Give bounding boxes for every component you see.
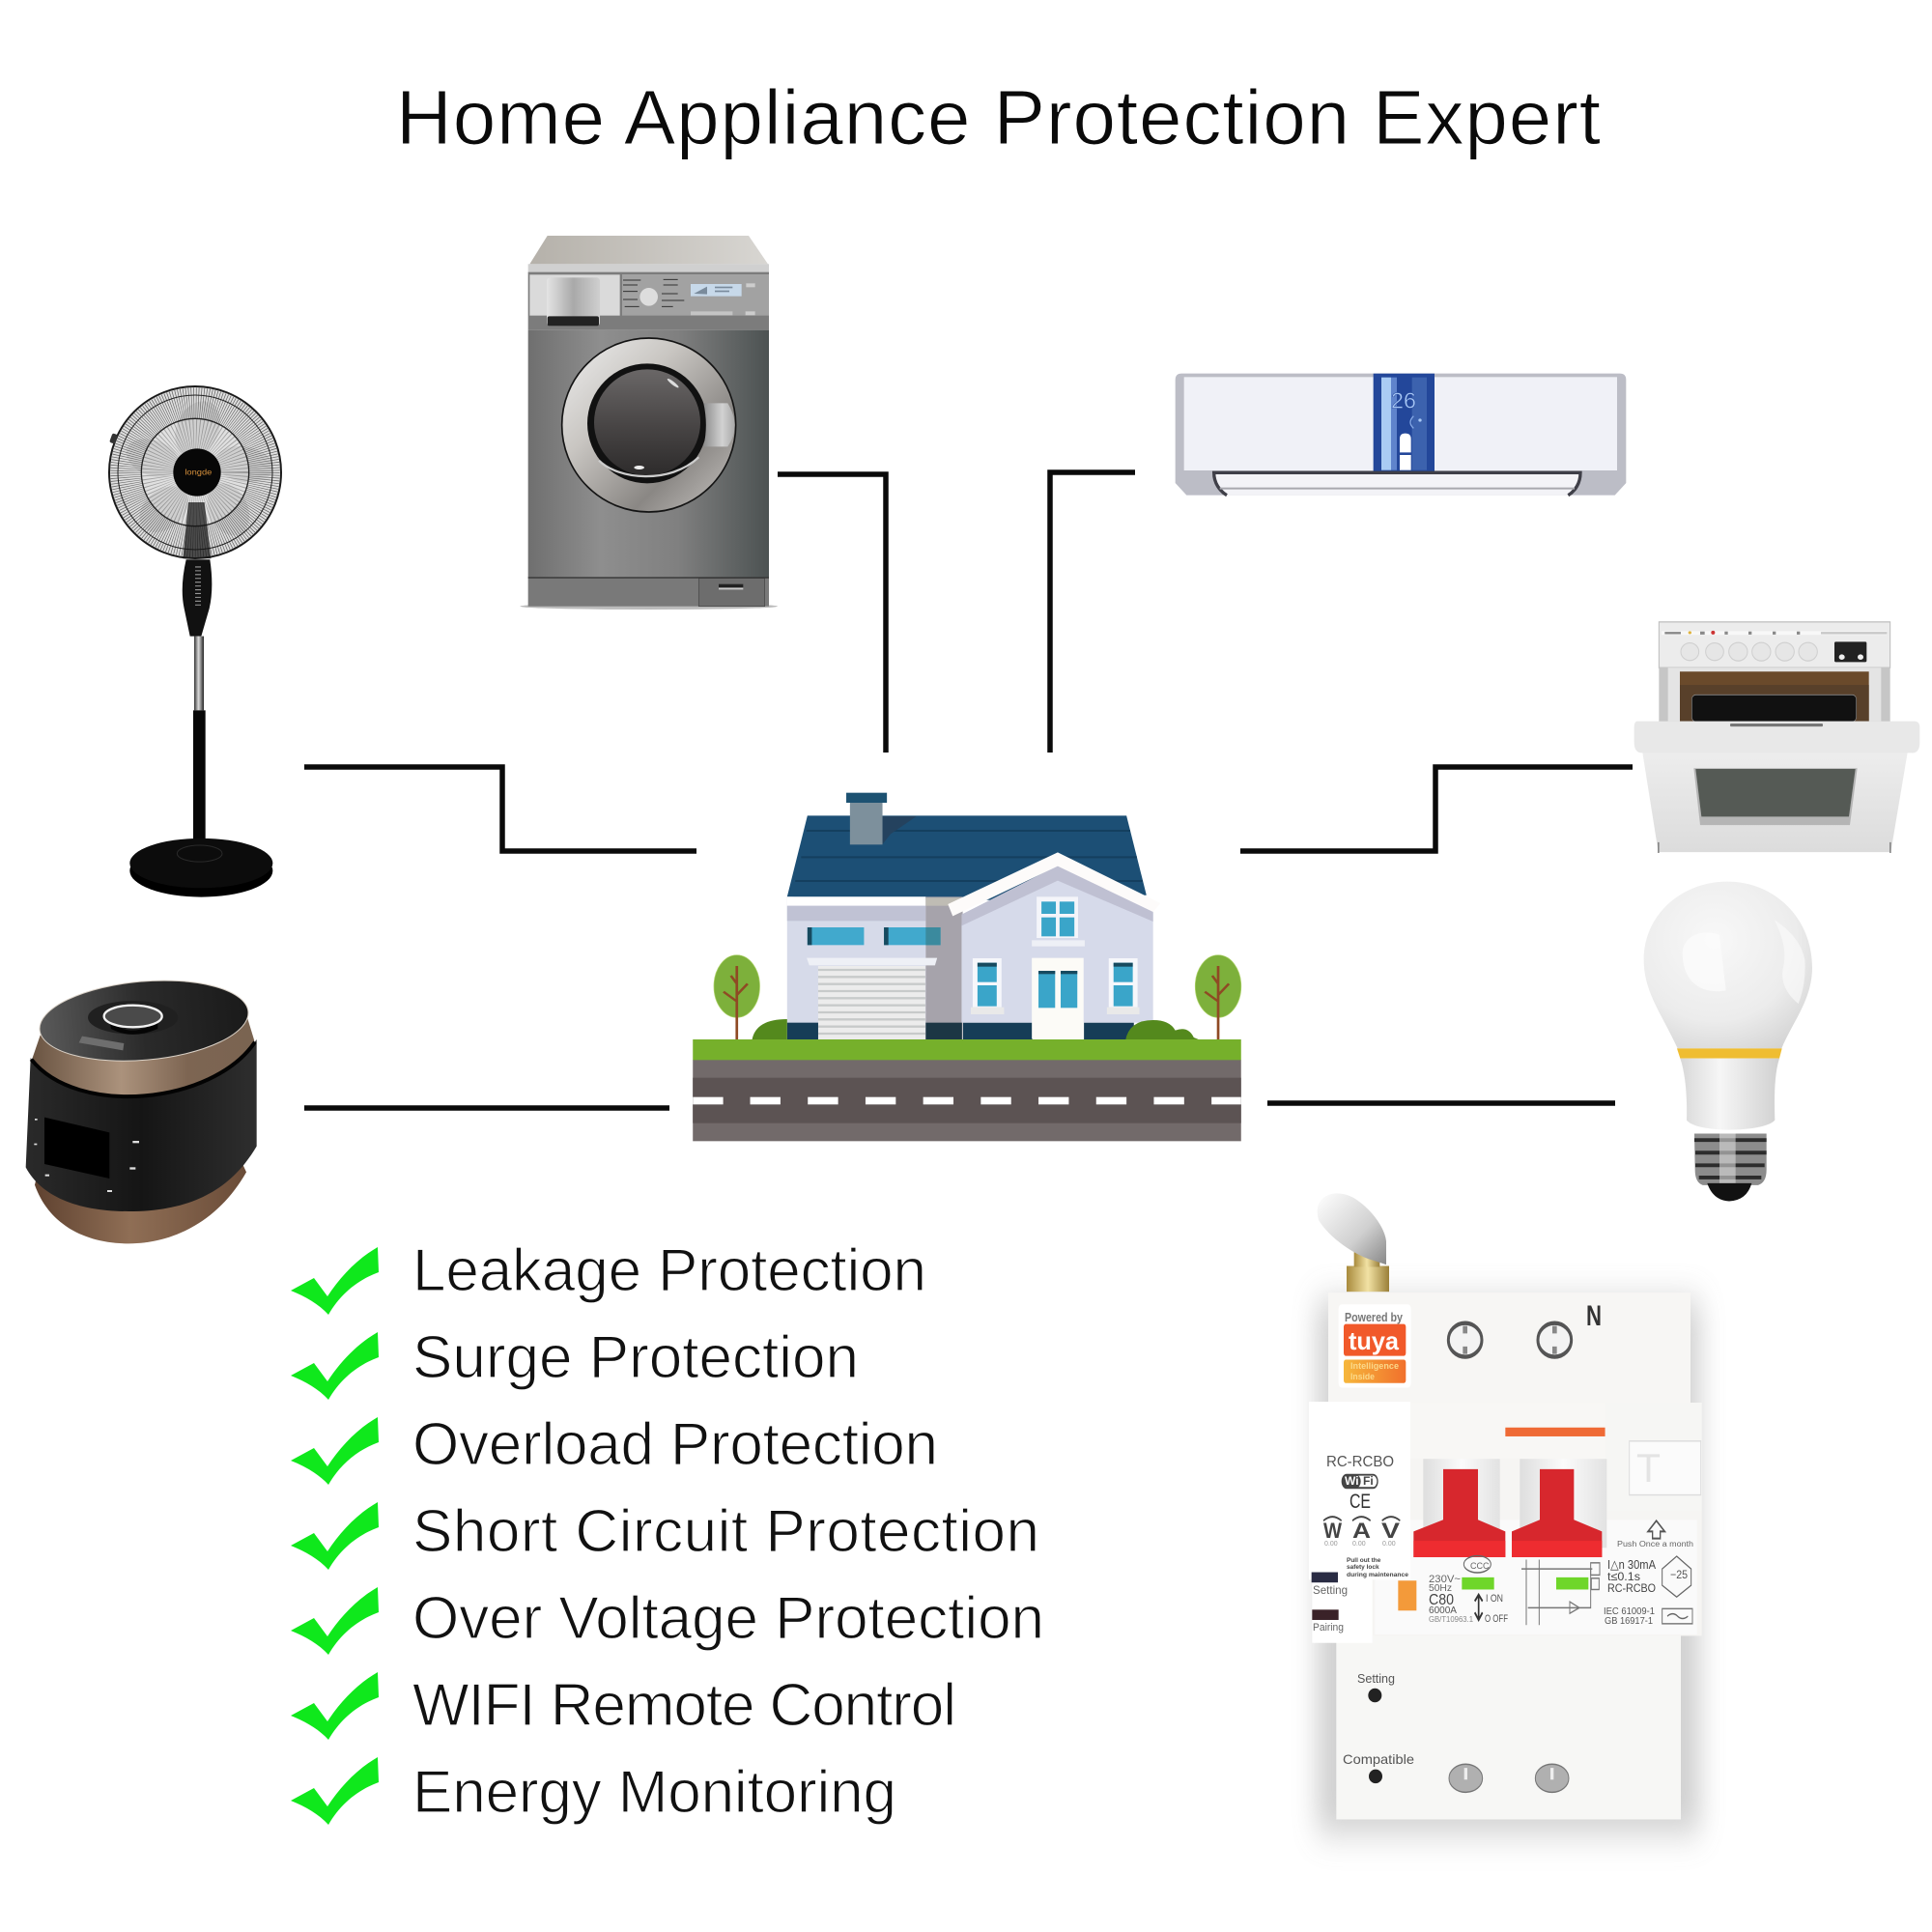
- breaker label text: O OFF: [1485, 1613, 1508, 1625]
- breaker label text: T: [1636, 1445, 1661, 1491]
- breaker label text: CE: [1350, 1491, 1371, 1513]
- breaker label text: Inside: [1350, 1372, 1375, 1382]
- breaker label text: I ON: [1486, 1593, 1503, 1605]
- breaker label text: N: [1586, 1300, 1602, 1332]
- dial: [88, 1001, 178, 1035]
- item: surge protection: Surge Protection: [412, 1324, 859, 1391]
- breaker label text: Wi: [1345, 1474, 1359, 1488]
- breaker label text: tuya: [1349, 1326, 1400, 1355]
- garage wing: [787, 896, 963, 1040]
- lawn: [693, 1039, 1241, 1061]
- fan hub: [173, 448, 221, 497]
- arrow: oven to house: [1240, 767, 1633, 851]
- icon: oven: [1634, 622, 1919, 853]
- breaker label text: I△n 30mA: [1607, 1557, 1656, 1572]
- breaker label text: V: [1381, 1519, 1400, 1543]
- arrow: rice cooker to house: [304, 1105, 669, 1111]
- antenna: [1318, 1193, 1389, 1292]
- title: Home Appliance Protection Expert: [396, 74, 1601, 160]
- foundation: [787, 1023, 1134, 1039]
- breaker label text: CCC: [1470, 1561, 1490, 1571]
- switch pole right: [1512, 1459, 1606, 1557]
- breaker label text: 0.00: [1324, 1541, 1338, 1548]
- breaker label text: IEC 61009-1: [1604, 1606, 1655, 1617]
- breaker label text: C80: [1429, 1592, 1454, 1608]
- road: [693, 1060, 1241, 1141]
- breaker label text: Pull out the: [1347, 1557, 1381, 1564]
- breaker label text: 230V~: [1429, 1574, 1461, 1585]
- breaker label text: RC-RCBO: [1607, 1581, 1656, 1595]
- breaker label text: Fi: [1363, 1474, 1374, 1488]
- roof: [787, 815, 1147, 901]
- breaker label text: Pairing: [1313, 1622, 1344, 1634]
- breaker label text: W: [1323, 1519, 1342, 1543]
- breaker label text: Compatible: [1343, 1751, 1414, 1767]
- upper module: [1328, 1293, 1690, 1403]
- breaker label text: 50Hz: [1429, 1583, 1452, 1594]
- fan hub: longde: [185, 468, 213, 477]
- icon: standing fan: [109, 386, 281, 897]
- main wing: [948, 852, 1160, 1038]
- breaker label text: −25: [1670, 1568, 1688, 1581]
- bushes: [752, 1019, 1202, 1040]
- setting button: [1368, 1689, 1381, 1702]
- breaker housing: [1309, 1193, 1702, 1833]
- breaker label text: [1313, 1300, 1693, 1767]
- connector lines: [304, 472, 1633, 1108]
- breaker label text: 6000A: [1429, 1605, 1457, 1616]
- item: over voltage protection: Over Voltage Protection: [412, 1585, 1044, 1652]
- breaker label text: GB/T10963.1: [1429, 1615, 1474, 1624]
- icon: washing machine: [520, 236, 778, 610]
- icon: rice cooker: [26, 973, 257, 1243]
- left label panel: [1309, 1402, 1416, 1643]
- icon: air conditioner: 26: [1391, 388, 1416, 413]
- switch pole left: [1413, 1459, 1505, 1557]
- arrow: air conditioner to house: [1050, 472, 1135, 753]
- breaker label text: during maintenance: [1347, 1572, 1408, 1578]
- chimney: [846, 793, 887, 844]
- breaker label text: Setting: [1313, 1583, 1348, 1597]
- icon: air conditioner: [1176, 374, 1626, 496]
- rating label symbols: [1462, 1520, 1692, 1625]
- compatible button: [1369, 1770, 1382, 1783]
- breaker label text: Intelligence: [1350, 1361, 1399, 1372]
- item: leakage protection: [291, 1237, 926, 1315]
- breaker body: [1372, 1403, 1702, 1635]
- item: short circuit protection: Short Circuit Protection: [412, 1498, 1039, 1565]
- breaker label text: A: [1352, 1519, 1371, 1543]
- arrow: light bulb to house: [1267, 1100, 1615, 1106]
- icon: light bulb: [1644, 882, 1812, 1201]
- item: surge protection: [291, 1324, 859, 1400]
- breaker label text: Setting: [1357, 1671, 1395, 1686]
- breaker label text: Push Once a month: [1617, 1540, 1693, 1548]
- item: wifi remote control: WIFI Remote Control: [412, 1672, 956, 1739]
- item: leakage protection: Leakage Protection: [412, 1237, 926, 1304]
- terminal screws bottom: [1449, 1764, 1569, 1792]
- arrow: washing machine to house: [778, 474, 886, 753]
- item: energy monitoring: Energy Monitoring: [412, 1759, 896, 1826]
- item: overload protection: Overload Protection: [412, 1411, 938, 1478]
- breaker label text: safety lock: [1347, 1564, 1379, 1571]
- tuya badge: [1339, 1304, 1411, 1388]
- breaker label text: 0.00: [1352, 1541, 1366, 1548]
- tree left: [714, 955, 759, 1039]
- arrow: fan to house: [304, 767, 696, 851]
- terminal screws top: [1448, 1323, 1572, 1357]
- breaker label text: 0.00: [1382, 1541, 1396, 1548]
- feature checklist: [291, 1237, 1044, 1826]
- fan stand: [129, 502, 272, 897]
- breaker label text: GB 16917-1: [1605, 1616, 1653, 1627]
- lower module: [1336, 1634, 1681, 1819]
- product: smart circuit breaker: [1309, 1193, 1702, 1833]
- tree right: [1195, 955, 1241, 1039]
- breaker label text: Powered by: [1345, 1311, 1403, 1324]
- icon: house scene: [693, 793, 1241, 1141]
- breaker label text: t≤0.1s: [1607, 1570, 1640, 1583]
- breaker label text: RC-RCBO: [1326, 1454, 1394, 1470]
- fan guard and blades: [109, 386, 281, 558]
